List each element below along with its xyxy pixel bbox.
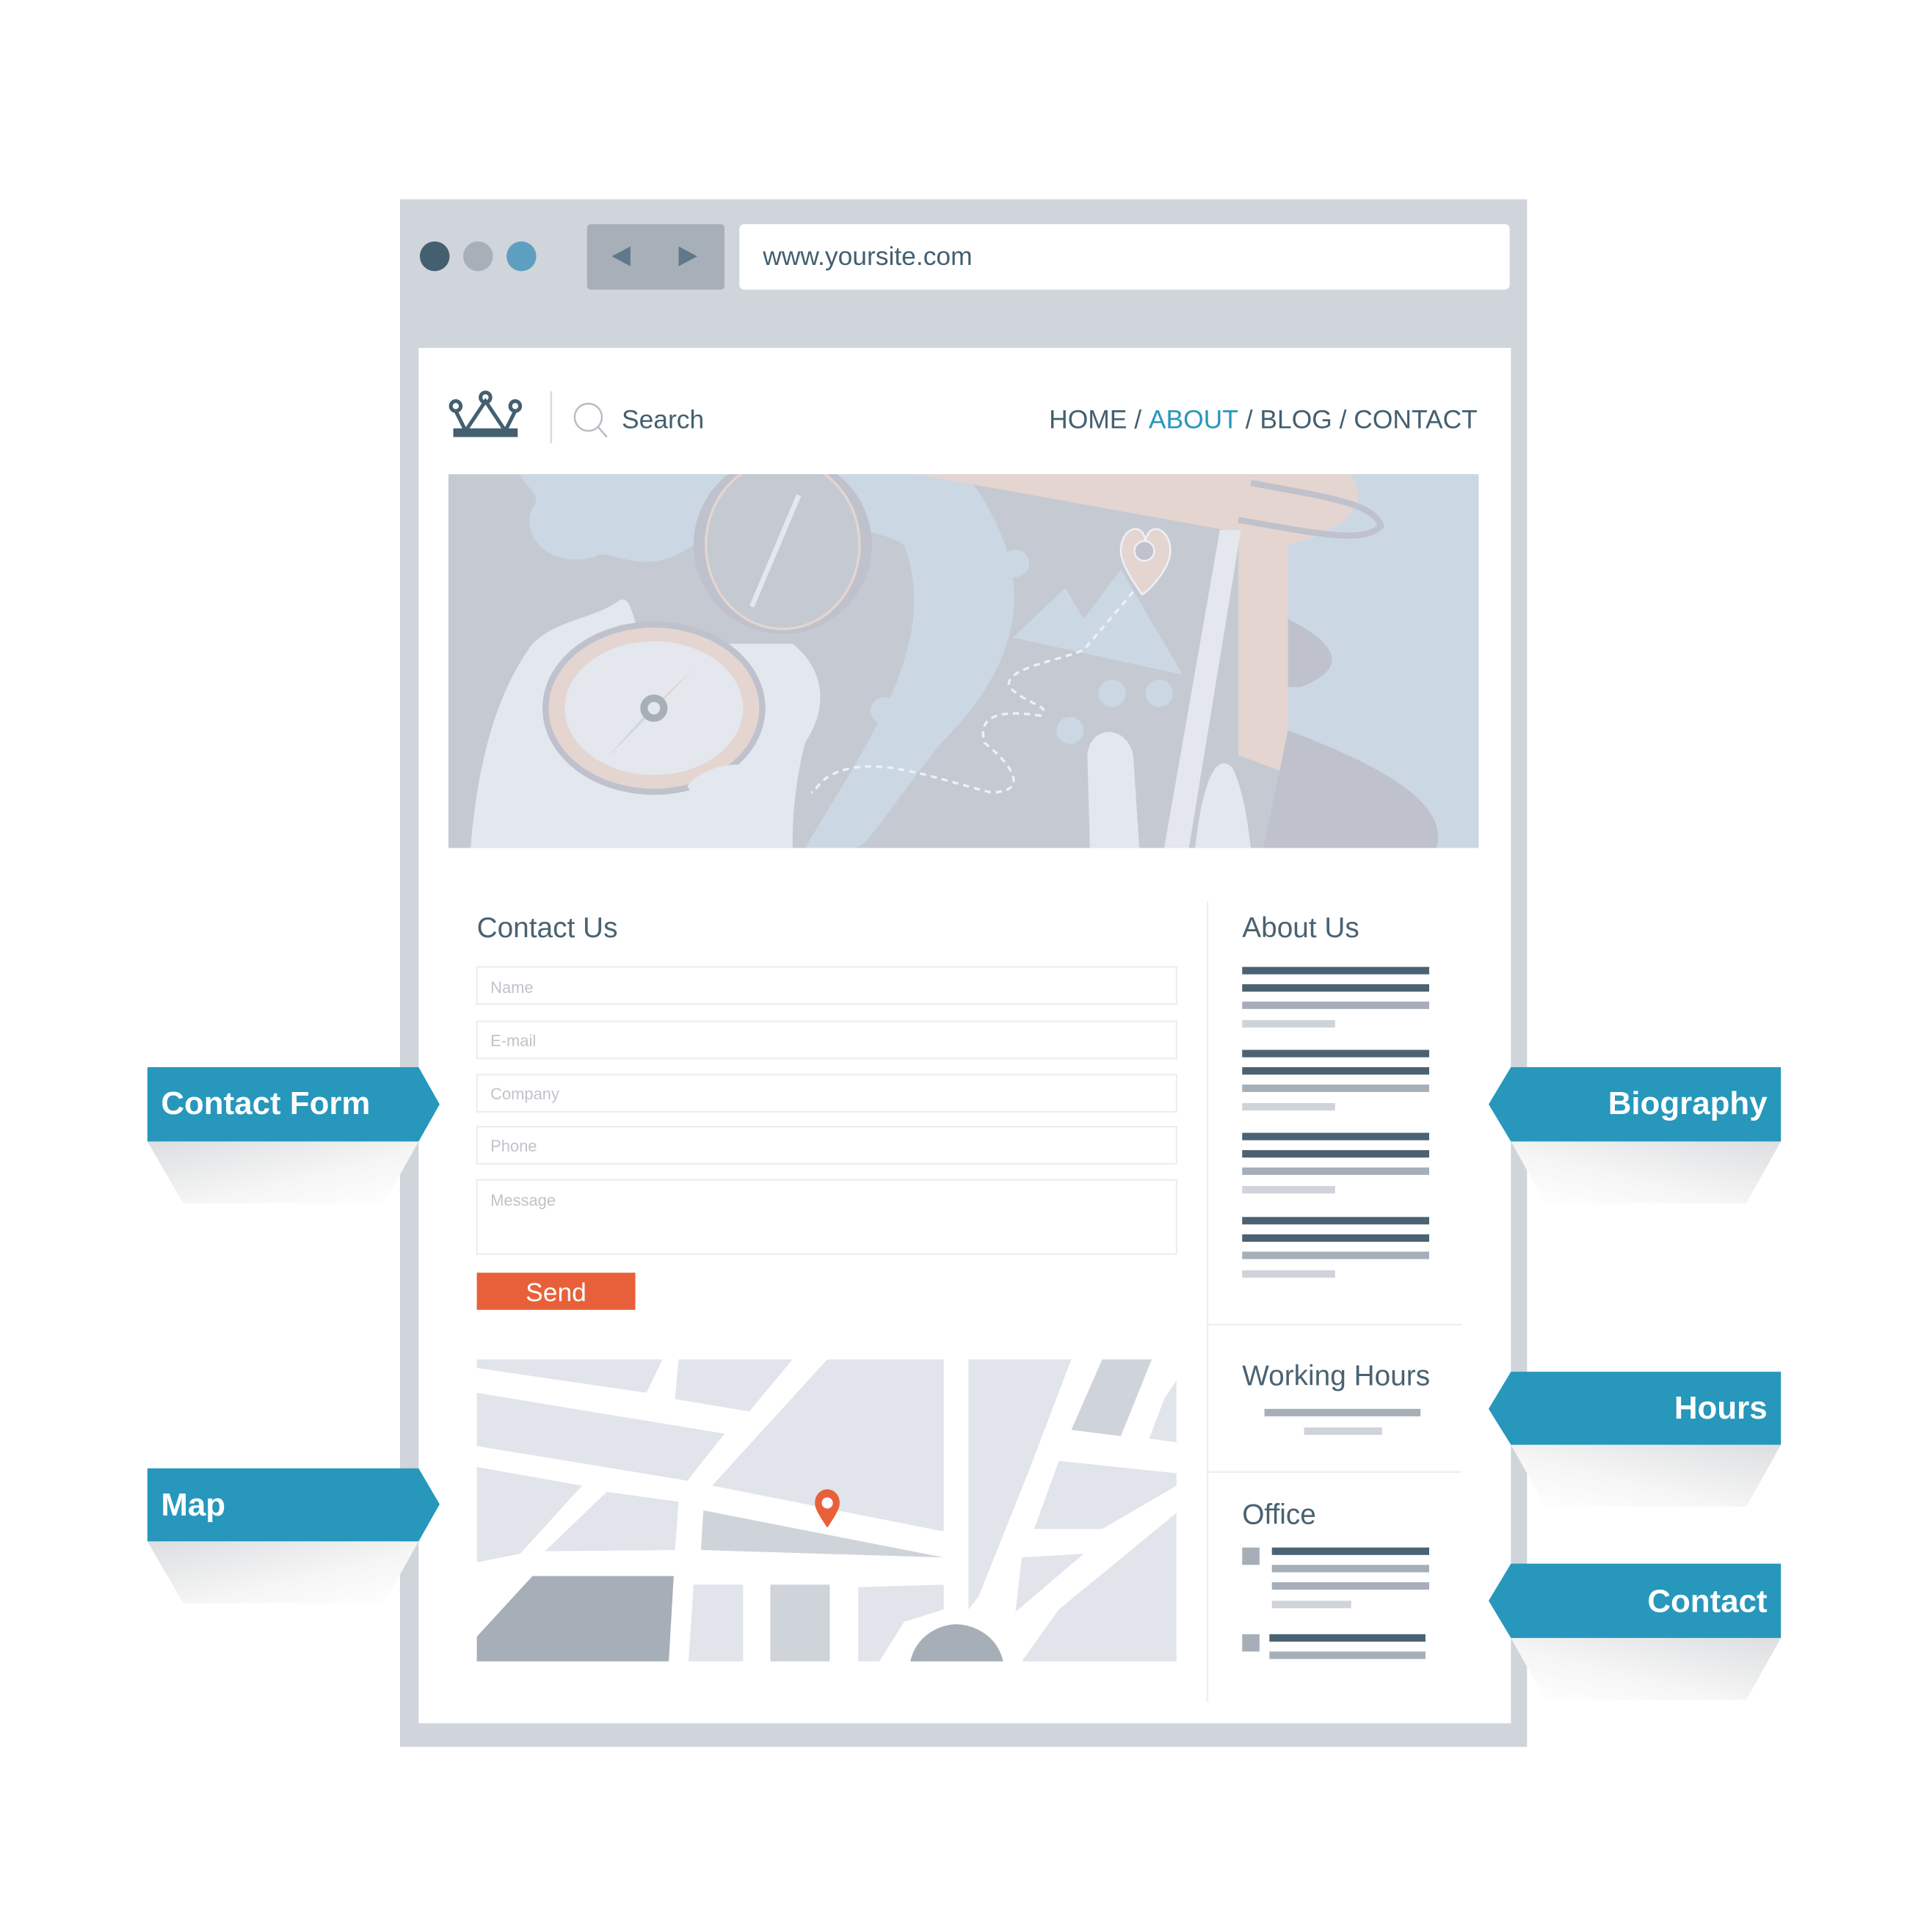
navigation menu: HOME / ABOUT / BLOG / CONTACT <box>1049 405 1478 434</box>
url bar: www.yoursite.com <box>762 241 973 271</box>
search: Search <box>622 405 704 434</box>
icon: phone <box>1242 1634 1260 1651</box>
callout: Hours: Hours <box>1674 1390 1768 1426</box>
office panel <box>1242 1499 1429 1659</box>
map <box>477 1359 1177 1662</box>
window control dots <box>420 241 537 271</box>
callout: Map: Map <box>161 1487 225 1523</box>
office panel: Office <box>1242 1499 1316 1531</box>
about us panel: About Us <box>1242 912 1359 944</box>
callout: Contact Form: Contact Form <box>161 1085 370 1121</box>
callout: Contact: Contact <box>1647 1583 1768 1619</box>
send button <box>477 1273 636 1310</box>
contact form panel: Name <box>490 978 534 997</box>
working hours panel: Working Hours <box>1242 1361 1430 1392</box>
callout: Map <box>148 1469 440 1604</box>
icon: send <box>1242 1548 1260 1565</box>
logo: crown <box>451 393 520 437</box>
callout: Biography <box>1489 1067 1781 1204</box>
browser window <box>400 200 1527 1747</box>
about us panel <box>1242 912 1429 1278</box>
page area <box>418 348 1511 1723</box>
callout: Hours <box>1489 1372 1781 1507</box>
contact form panel <box>477 912 1177 1310</box>
hero image <box>448 456 1478 848</box>
nav buttons <box>587 224 724 290</box>
working hours panel <box>1242 1361 1430 1435</box>
contact form panel: E-mail <box>490 1031 536 1049</box>
heading: Contact Us: Contact Us <box>477 912 617 944</box>
form fields <box>477 967 1177 1254</box>
url bar <box>739 224 1510 290</box>
callout: Biography: Biography <box>1608 1085 1768 1121</box>
callout: Contact <box>1489 1564 1781 1700</box>
contact form panel: Message <box>490 1191 556 1209</box>
contact form panel: Phone <box>490 1137 537 1155</box>
search <box>575 404 704 437</box>
contact form panel: Company <box>490 1085 559 1103</box>
send button: Send <box>526 1278 586 1307</box>
icon: map pin <box>815 1489 840 1528</box>
callout: Contact Form <box>148 1067 440 1204</box>
